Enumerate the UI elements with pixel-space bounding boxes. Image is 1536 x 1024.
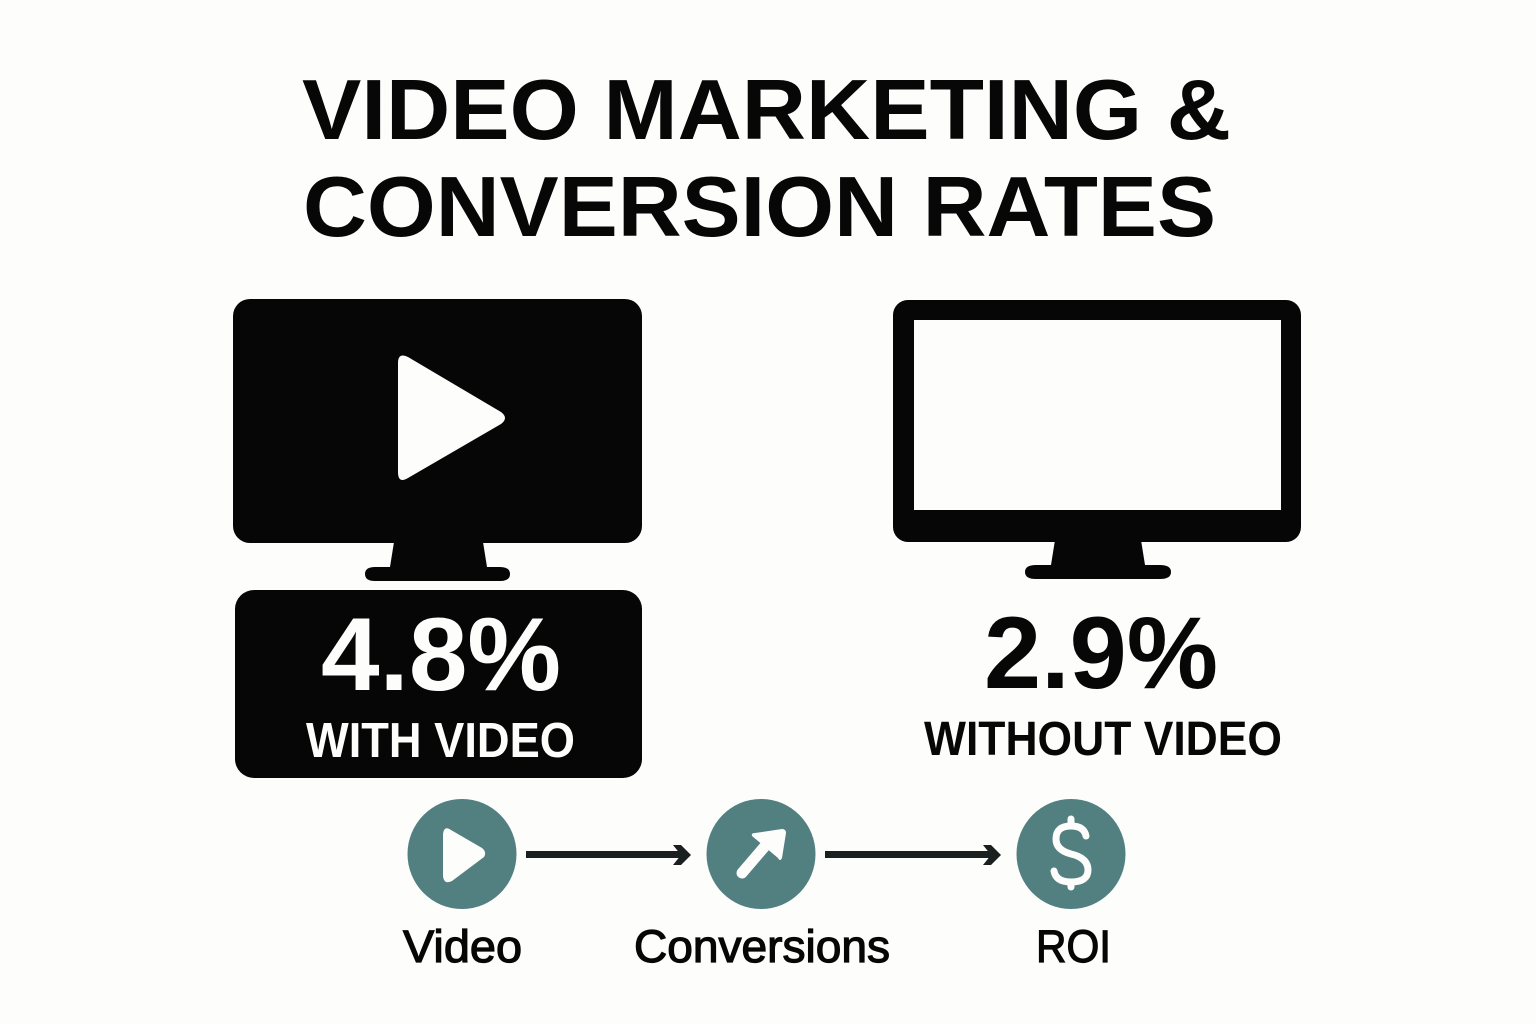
step: conversions: Conversions xyxy=(634,921,890,972)
panel: with video xyxy=(233,299,642,778)
title xyxy=(302,63,1231,255)
step: conversions xyxy=(634,799,890,972)
icon: filled monitor with play button xyxy=(233,299,642,581)
stat card: 4.8% with video: 4.8% xyxy=(321,597,561,713)
stat: 2.9% without video: 2.9% xyxy=(984,596,1218,710)
stat: 2.9% without video xyxy=(924,596,1282,766)
arrow: video to conversions xyxy=(526,845,691,865)
stat card: 4.8% with video xyxy=(235,590,642,778)
step: video: Video xyxy=(403,921,522,972)
stat card: 4.8% with video: WITH VIDEO xyxy=(306,714,575,768)
step: ROI xyxy=(1016,799,1126,972)
stat: 2.9% without video: WITHOUT VIDEO xyxy=(924,713,1282,766)
step: ROI: ROI xyxy=(1036,921,1111,972)
step: video xyxy=(403,799,522,972)
title: CONVERSION RATES xyxy=(303,160,1216,255)
icon: empty monitor xyxy=(893,300,1301,579)
panel: without video xyxy=(893,300,1301,766)
arrow: conversions to ROI xyxy=(825,845,1001,865)
title: VIDEO MARKETING & xyxy=(302,63,1231,158)
flow: video to conversions to ROI xyxy=(403,799,1126,972)
